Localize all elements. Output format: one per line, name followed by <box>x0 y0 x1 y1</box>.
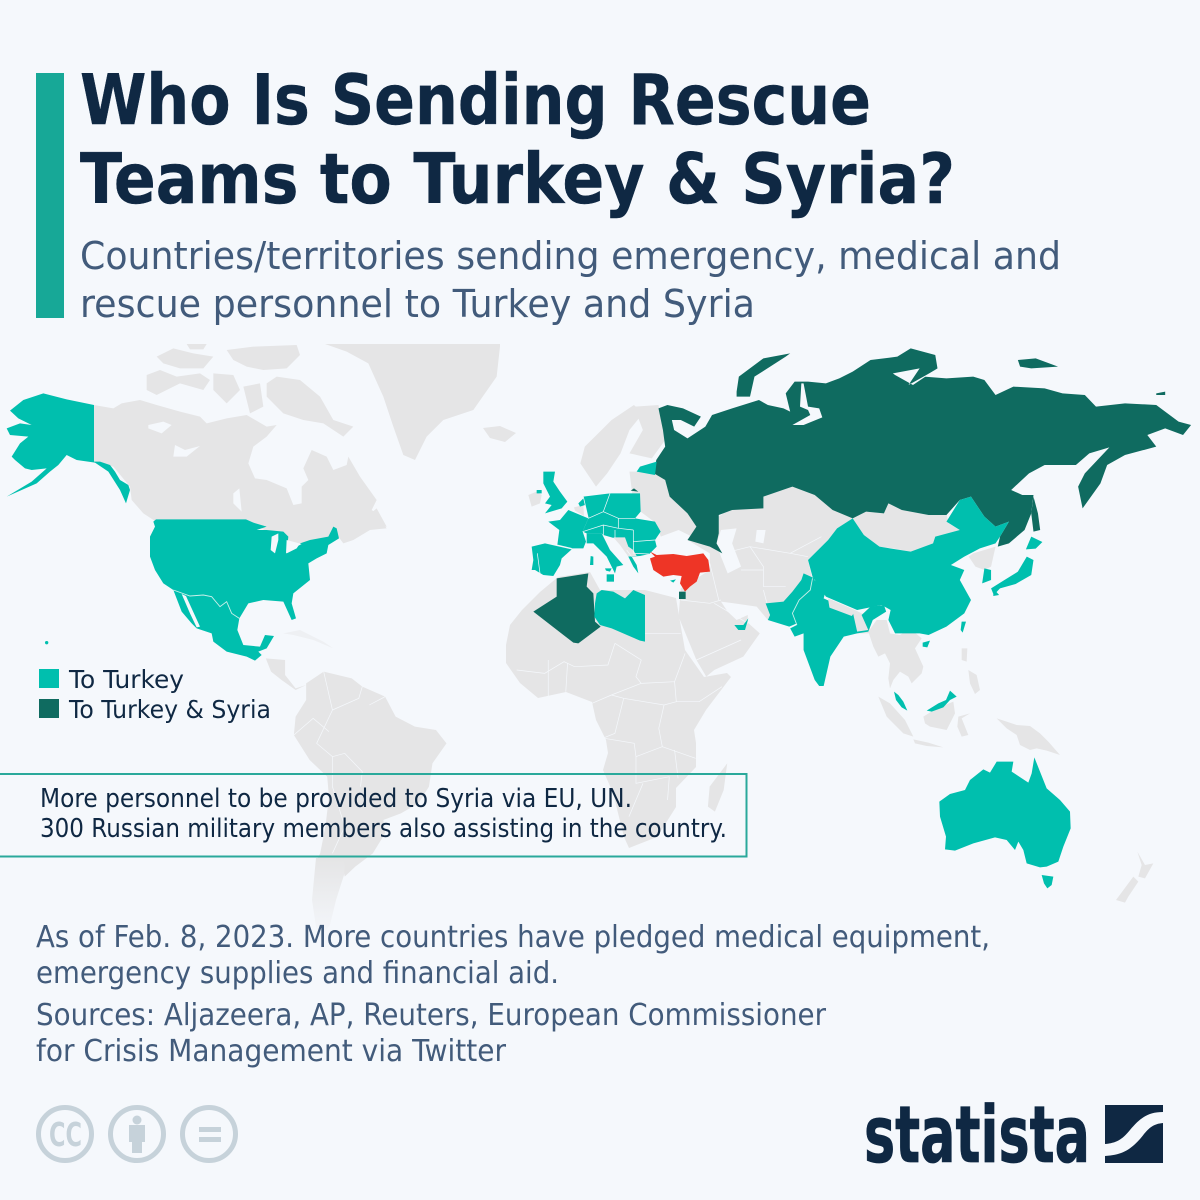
japan <box>991 537 1042 596</box>
cyprus <box>670 579 676 583</box>
arctic islands <box>147 344 387 527</box>
africa <box>506 572 731 848</box>
eurasia base <box>580 405 996 677</box>
greenland <box>325 344 500 460</box>
title: Teams to Turkey & Syria? <box>80 139 955 220</box>
legend item: to turkey and syria: To Turkey & Syria <box>68 695 271 724</box>
belgium and netherlands <box>574 505 584 516</box>
sources: for Crisis Management via Twitter <box>36 1034 507 1069</box>
caspian and aral seas <box>717 528 766 573</box>
denmark <box>578 498 585 507</box>
cuba <box>283 630 333 648</box>
south korea <box>982 568 991 583</box>
middle east and central asia <box>679 487 853 677</box>
canada <box>94 400 387 547</box>
european borders <box>537 493 655 573</box>
footnote: emergency supplies and financial aid. <box>36 956 559 991</box>
hawaii <box>45 641 48 644</box>
estonia <box>637 462 657 475</box>
world map <box>7 344 1191 940</box>
sources <box>36 998 827 1069</box>
russian islands <box>737 353 1165 532</box>
title <box>80 60 955 220</box>
patagonia fade <box>312 858 345 940</box>
lebanon <box>679 592 686 599</box>
central and eastern europe <box>583 493 661 573</box>
title: Who Is Sending Rescue <box>80 60 871 141</box>
scandinavia and finland <box>580 405 665 487</box>
south america <box>294 672 446 877</box>
footnote: As of Feb. 8, 2023. More countries have pledged medical equipment, <box>36 920 990 955</box>
spencer gulf <box>1015 843 1021 856</box>
france <box>548 510 588 548</box>
callout <box>0 774 746 856</box>
malta <box>607 574 614 582</box>
russia <box>654 348 1191 553</box>
united kingdom <box>537 472 567 513</box>
icon: attribution <box>110 1108 164 1160</box>
siberian gulfs <box>792 368 935 425</box>
middle east borders <box>645 537 821 660</box>
subtitle <box>80 234 1061 326</box>
russia, china, india, japan <box>654 348 1191 686</box>
icon: creative commons <box>38 1108 92 1160</box>
north korea <box>969 547 996 570</box>
title accent bar <box>36 73 64 318</box>
southeast asia and oceania <box>868 620 1153 903</box>
sources: Sources: Aljazeera, AP, Reuters, European Commissioner <box>36 998 827 1033</box>
malaysia <box>894 691 957 712</box>
indonesia, philippines, new guinea <box>878 648 1060 755</box>
spain and portugal <box>532 543 572 576</box>
icon: no derivatives <box>182 1108 236 1160</box>
icon: creative commons: CC <box>49 1115 82 1154</box>
canadian lakes <box>148 422 242 512</box>
ukraine belarus baltics <box>629 472 699 537</box>
australia <box>939 757 1071 888</box>
indochina <box>868 620 923 688</box>
statista logo: statista <box>864 1091 1090 1181</box>
pakistan <box>766 573 815 627</box>
legend item: to turkey: To Turkey <box>68 665 184 694</box>
belarus speck <box>631 488 638 492</box>
turkey and syria <box>650 552 710 592</box>
usa and mexico <box>150 519 339 661</box>
alaska <box>7 393 130 503</box>
new zealand <box>1116 852 1153 903</box>
great lakes <box>271 533 302 553</box>
balkans not sending <box>613 537 637 557</box>
mongolia <box>853 503 960 552</box>
icon: statista mark <box>1105 1105 1163 1163</box>
algeria <box>533 573 601 643</box>
libya <box>594 590 645 642</box>
india pakistan border <box>792 578 813 625</box>
madagascar <box>708 763 727 812</box>
central america <box>266 658 306 690</box>
iceland <box>483 426 516 442</box>
bangladesh nepal <box>828 598 871 633</box>
uae <box>734 618 748 630</box>
gulf of california <box>182 594 200 627</box>
china <box>808 497 1009 635</box>
taiwan and hainan <box>923 622 966 647</box>
south america, central america, africa details <box>266 658 727 877</box>
us mexico border <box>173 590 239 618</box>
ireland <box>528 492 542 507</box>
subtitle: rescue personnel to Turkey and Syria <box>80 282 755 326</box>
legend <box>39 665 271 724</box>
north america <box>7 344 516 661</box>
india <box>790 578 886 686</box>
nepal <box>828 599 855 616</box>
europe and north africa highlights <box>528 462 748 643</box>
subtitle: Countries/territories sending emergency, medical and <box>80 234 1061 278</box>
footnote <box>36 920 990 991</box>
africa and south america borders <box>294 643 722 853</box>
italy <box>587 533 623 573</box>
callout: More personnel to be provided to Syria via EU, UN. <box>40 784 632 814</box>
callout: 300 Russian military members also assisting in the country. <box>40 814 727 844</box>
